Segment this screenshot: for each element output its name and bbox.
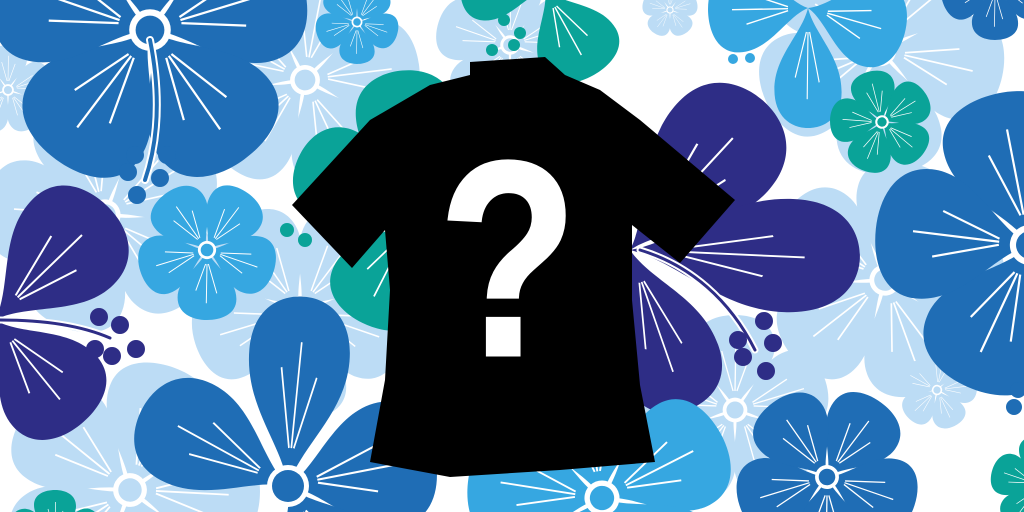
flower: blue bottom centre [117, 292, 448, 512]
petal: blue left [117, 360, 314, 512]
flower: teal small top right [814, 57, 950, 190]
flower: blue right edge [834, 59, 1024, 440]
petal: teal top right [509, 0, 630, 96]
centre ring: blue bottom [267, 465, 309, 507]
petal: blue right [275, 393, 448, 512]
petal: mid blue down [774, 8, 842, 128]
flower: small pale left [0, 45, 57, 138]
petal: teal upper [352, 66, 465, 219]
flower: pale top centre [429, 0, 591, 124]
question mark: ? [438, 103, 578, 414]
petal: teal left [279, 113, 437, 256]
flower: teal bottom left corner [1, 490, 109, 512]
centre: blue bottom [272, 470, 304, 502]
flower: mid blue small top [294, 0, 418, 85]
petal: navy right [628, 193, 862, 315]
flower: pale right [727, 131, 1024, 436]
flower: pale lower right [632, 315, 838, 510]
flower: pale left [0, 66, 263, 371]
flower: pale bottom left [0, 320, 306, 512]
flower: teal right edge [986, 435, 1024, 512]
flower: blue top right corner [913, 0, 1024, 67]
flower: navy left [0, 165, 150, 459]
flower: blue bottom right [689, 344, 962, 512]
petal: navy left upper [0, 165, 150, 362]
flower: pale mid-left [136, 151, 461, 474]
petal: navy lower [583, 233, 736, 427]
flower: blue top left [0, 0, 323, 199]
petal: blue top [238, 292, 355, 490]
flower: small pale right [887, 343, 987, 439]
petal: blue lower [233, 454, 418, 512]
petal: teal top left [457, 0, 548, 26]
petal: navy left lower [0, 285, 124, 459]
flower: small pale top [640, 0, 700, 40]
flower: mid blue top right [707, 0, 915, 128]
flower: pale top right [697, 0, 1024, 232]
flower: pale top centre-left [162, 0, 447, 221]
flower: mid blue bottom centre [435, 340, 770, 512]
petal: teal lower [317, 193, 460, 345]
petal: navy upper [583, 59, 811, 292]
petal: mid blue right [797, 0, 915, 74]
flower: teal behind shirt [279, 66, 465, 345]
petal: mid blue left [707, 0, 809, 53]
stamens and dots [0, 14, 1024, 415]
flower: navy right of shirt [583, 59, 862, 427]
flower: mid blue small left [102, 149, 309, 354]
shirt silhouette [292, 57, 735, 477]
